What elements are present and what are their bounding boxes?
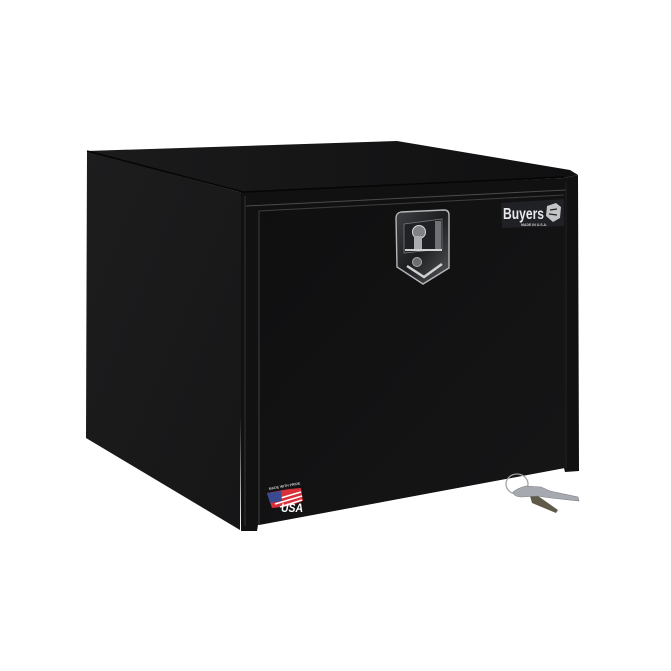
logo: made in USA flag: USA: [281, 503, 303, 515]
icon: keys on a ring: [506, 474, 579, 513]
box: left side panel: [86, 151, 243, 530]
icon: T-handle latch: [396, 210, 449, 284]
door: frame highlights: [245, 182, 566, 526]
box: front frame: [241, 175, 579, 531]
logo: made in USA flag: [267, 481, 303, 515]
box: crease under top panel: [87, 151, 564, 192]
box: front door panel: [259, 194, 565, 525]
logo: Buyers badge: [501, 199, 564, 228]
logo: Buyers badge: MADE IN U.S.A.: [521, 223, 547, 227]
box: top panel: [87, 141, 578, 193]
logo: made in USA flag: MADE WITH PRIDE: [268, 481, 301, 491]
logo: Buyers badge: Buyers: [503, 206, 544, 223]
